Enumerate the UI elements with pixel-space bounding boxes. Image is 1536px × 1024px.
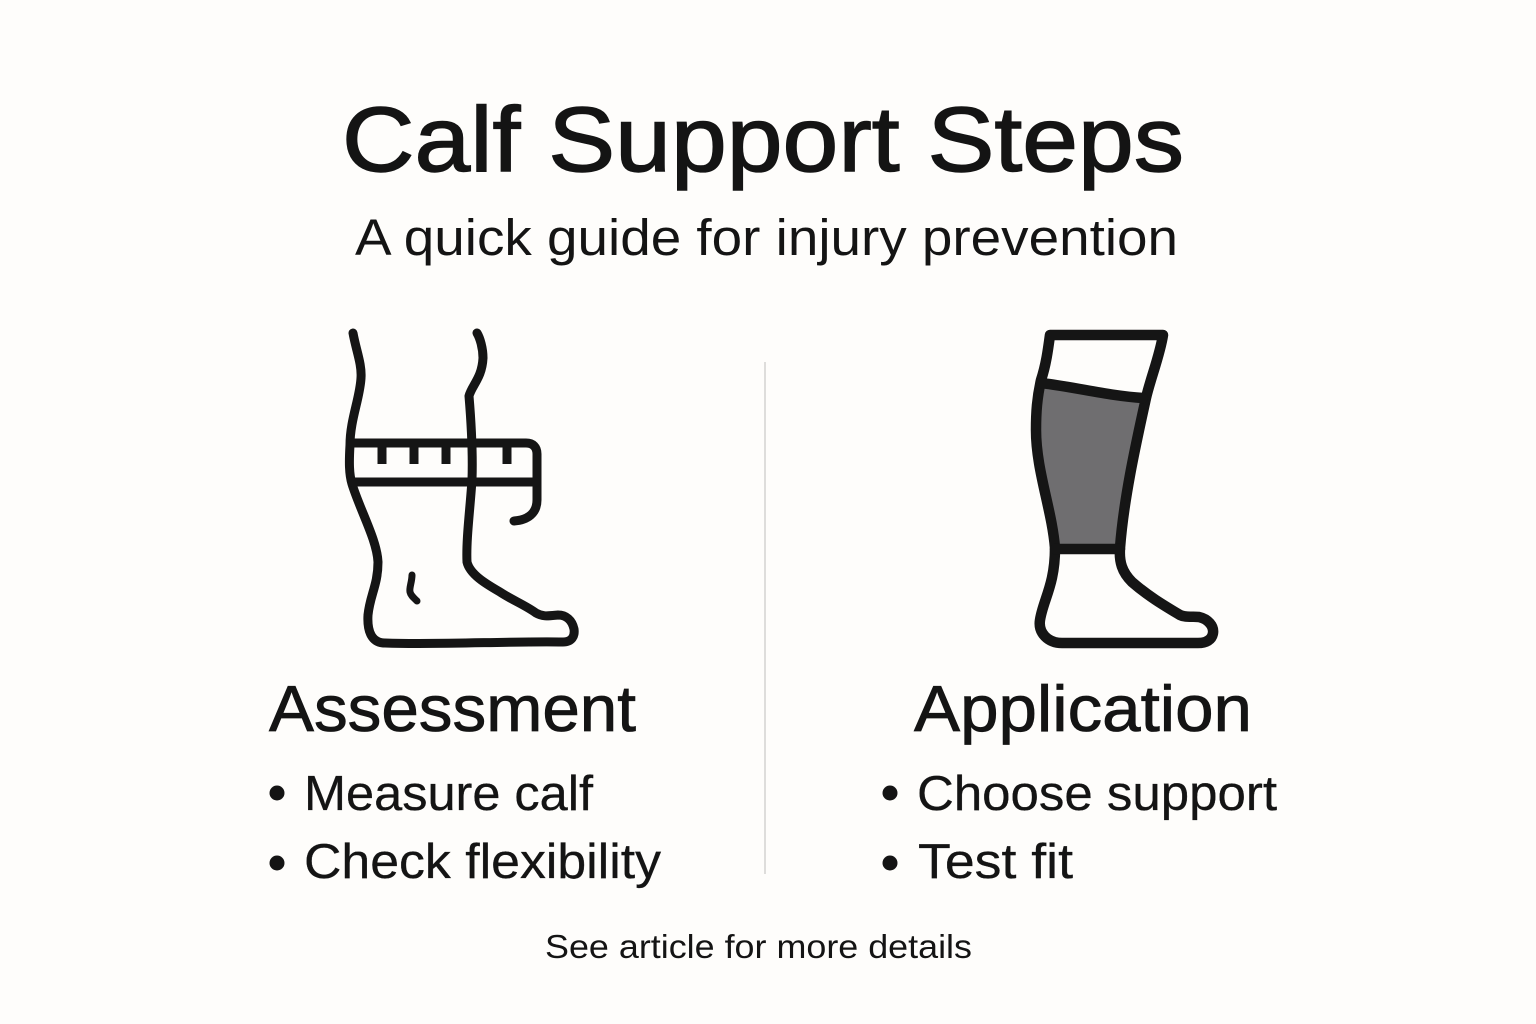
title: Calf Support Steps [342,89,1184,191]
heading: application: Application [914,672,1252,745]
footer note: See article for more details [545,928,972,965]
icon: leg with compression sleeve [1036,335,1213,643]
panel: application [882,335,1277,889]
panel: assessment [269,333,662,889]
icon: calf with measuring tape [349,333,574,644]
center divider [764,362,766,874]
subtitle: A quick guide for injury prevention [355,209,1178,266]
bullet list: assessment: Measure calf [304,767,593,821]
heading: assessment: Assessment [269,672,636,745]
bullet list: application [882,767,1277,889]
bullet list: assessment: Check flexibility [304,835,662,889]
bullet list: application: Test fit [918,835,1073,889]
bullet list: assessment [270,767,662,889]
bullet list: application: Choose support [917,767,1277,821]
